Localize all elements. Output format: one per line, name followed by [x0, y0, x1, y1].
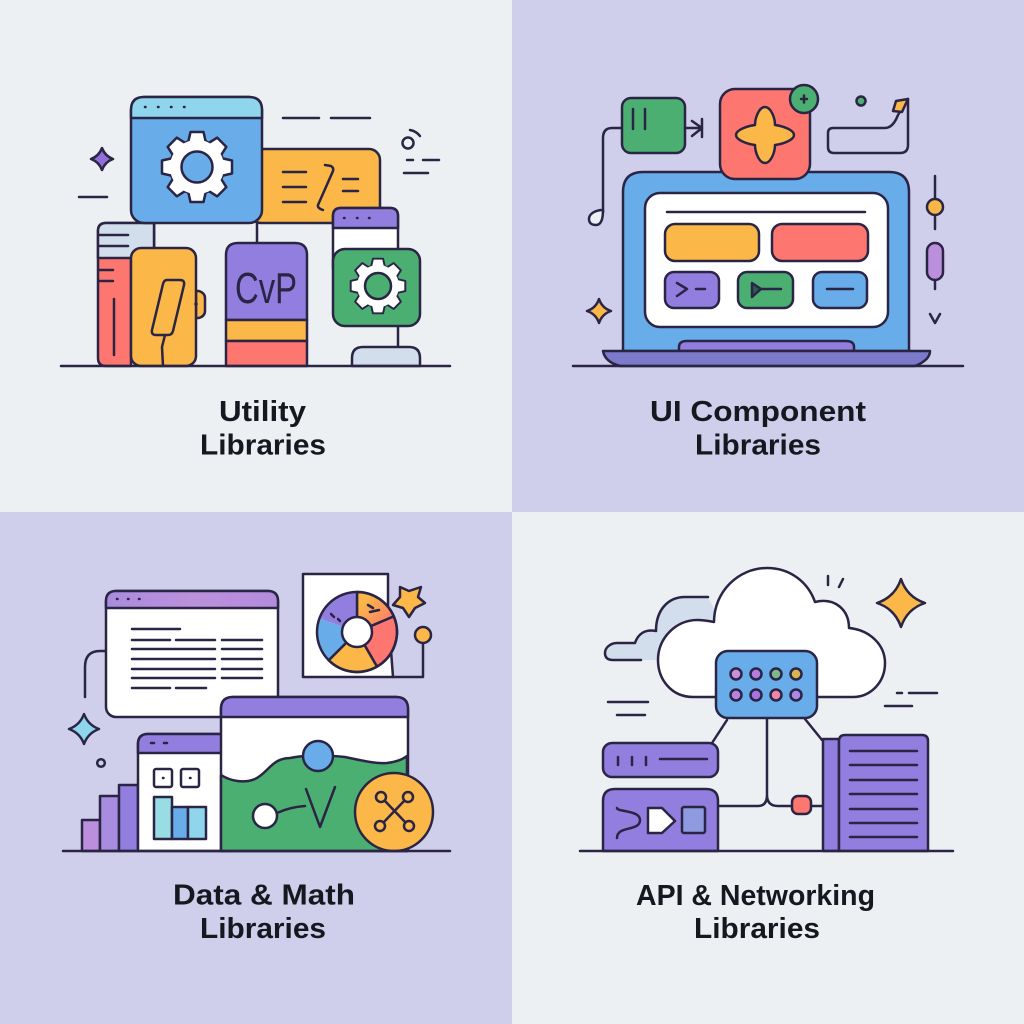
ground line [573, 365, 963, 367]
heading: UI Component Libraries: Libraries [695, 430, 821, 462]
heading: API and Networking Libraries [636, 880, 875, 945]
heading: Data and Math Libraries: Libraries [200, 913, 326, 945]
accent lines top [283, 117, 370, 119]
ground line [61, 365, 450, 367]
icon: circle and accent lines right [402, 130, 439, 173]
panel: Data and Math Libraries [0, 512, 512, 1024]
ui buttons [665, 224, 868, 308]
red book [98, 223, 154, 366]
heading: API and Networking Libraries: API & Networking [636, 880, 875, 912]
laptop [603, 172, 930, 366]
connector lines [154, 223, 257, 250]
panel: Utility Libraries [0, 0, 512, 512]
text window [85, 591, 278, 717]
accent lines [608, 693, 937, 715]
back cloud [605, 597, 720, 660]
icon: sparkle purple [91, 148, 113, 170]
small window with bars [138, 734, 225, 851]
panel: API and Networking Libraries [512, 512, 1024, 1024]
green square with arrow [622, 98, 702, 153]
blue device [716, 651, 817, 718]
heading: Utility Libraries [200, 396, 326, 462]
network connectors [712, 718, 822, 806]
heading: UI Component Libraries [650, 396, 866, 462]
icon: sparkle yellow [587, 299, 611, 323]
icon: sparkle teal [69, 714, 99, 744]
wire with leaf [589, 128, 622, 225]
red card with star [720, 85, 818, 179]
rays [828, 576, 843, 587]
yellow code panel [250, 149, 380, 223]
panel: UI Component Libraries [512, 0, 1024, 512]
yellow card [131, 248, 205, 366]
small circle [97, 759, 105, 767]
heading: Utility Libraries: Utility [219, 396, 306, 428]
open tag outline [828, 96, 908, 153]
red chip [792, 796, 811, 814]
donut chart [317, 592, 397, 672]
step bars [82, 785, 138, 851]
icon: sparkle yellow [877, 579, 925, 627]
document stack [823, 735, 928, 851]
heading: API and Networking Libraries: Libraries [694, 913, 820, 945]
server bar [603, 743, 718, 777]
purple media block [603, 789, 718, 851]
heading: Data and Math Libraries [173, 880, 355, 945]
large window with wave [221, 697, 408, 851]
ground line [63, 850, 450, 852]
accent lines left [79, 196, 107, 198]
ground line [580, 850, 953, 852]
heading: Data and Math Libraries: Data & Math [173, 880, 355, 912]
heading: UI Component Libraries: UI Component [650, 396, 866, 428]
slider controls [927, 176, 943, 323]
phone with green gear card [333, 208, 420, 366]
yellow node circle [355, 773, 433, 851]
main settings window [131, 97, 262, 223]
heading: Utility Libraries: Libraries [200, 430, 326, 462]
icon: star [393, 587, 425, 617]
label: CvP: CvP [235, 264, 297, 313]
main cloud [658, 568, 885, 697]
chart card with donut [303, 574, 431, 677]
purple CvP block [226, 243, 307, 366]
